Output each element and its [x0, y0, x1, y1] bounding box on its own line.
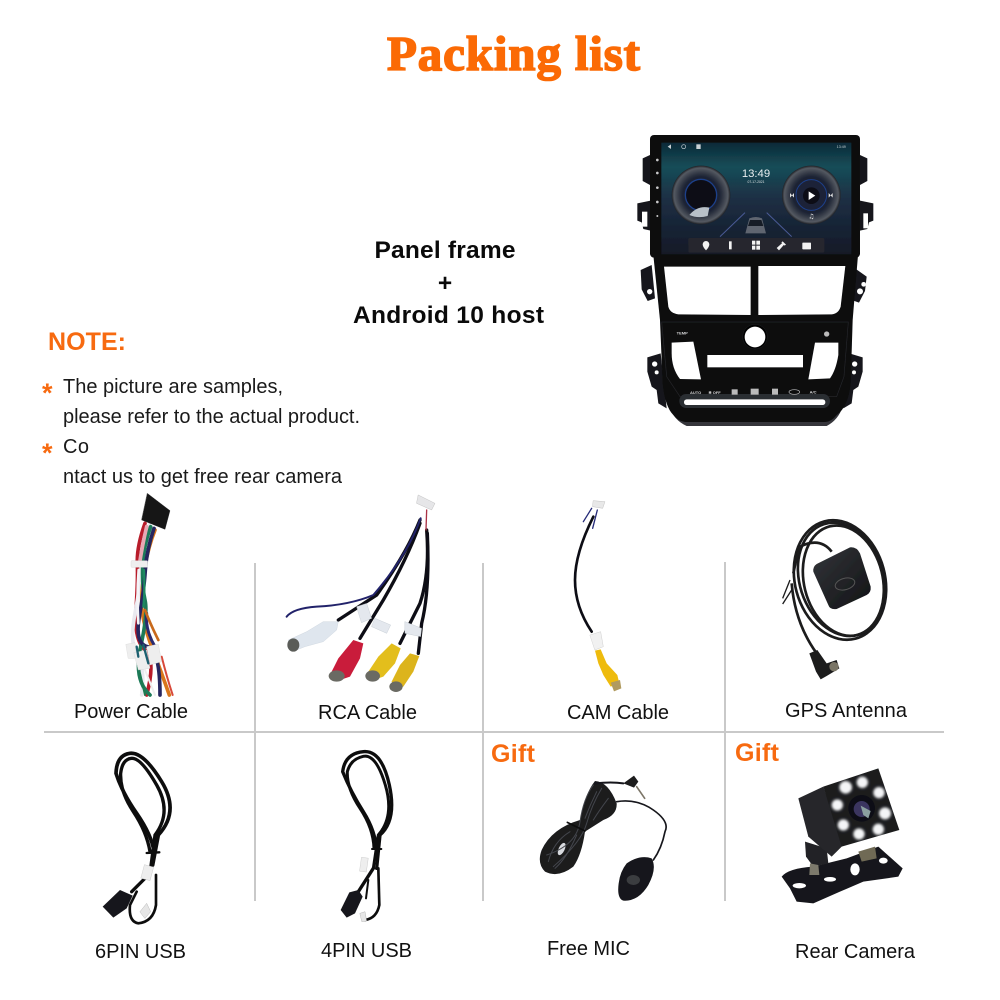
note text block: please refer to the actual product. — [63, 406, 360, 428]
screen bezel — [650, 135, 860, 258]
product image: head unit with panel frame: 07-17-2021 — [747, 180, 765, 184]
top status — [668, 144, 846, 149]
note text block: ntact us to get free rear camera — [63, 466, 343, 488]
white plug — [288, 622, 338, 651]
right dial: ♫ — [808, 213, 814, 221]
note text block: * — [42, 378, 53, 408]
road and car — [720, 213, 792, 237]
heading: panel frame and host — [353, 237, 544, 329]
label: 4PIN USB: 4PIN USB — [321, 940, 412, 962]
product image: CAM cable — [575, 501, 621, 691]
heading: panel frame and host: + — [438, 270, 452, 297]
climate labels — [677, 331, 829, 395]
label: RCA cable: RCA Cable — [318, 702, 417, 724]
side brackets — [637, 155, 873, 408]
yellow plugs — [368, 643, 401, 680]
gift tag: rear camera: Gift — [735, 739, 780, 767]
right dial — [782, 166, 841, 224]
vent cutouts — [664, 267, 751, 315]
product image: GPS antenna — [781, 510, 900, 679]
climate labels: TEMP — [677, 331, 688, 336]
screen — [661, 143, 851, 254]
top status: 13:49 — [837, 145, 846, 149]
product image: 4PIN USB — [341, 752, 392, 922]
label: free mic: Free MIC — [547, 938, 630, 960]
product image: head unit with panel frame — [637, 135, 873, 426]
product image: power cable — [126, 493, 173, 695]
label: GPS antenna: GPS Antenna — [785, 700, 908, 722]
product image: RCA cable — [287, 495, 435, 692]
climate labels: ❄ OFF — [708, 390, 721, 395]
side buttons — [656, 159, 659, 217]
label: power cable: Power Cable — [74, 701, 188, 723]
frame body — [670, 407, 843, 426]
left dial — [672, 166, 730, 224]
heading: panel frame and host: Android 10 host — [353, 302, 544, 329]
note text block: Co — [63, 436, 89, 458]
label: 6PIN USB: 6PIN USB — [95, 941, 186, 963]
note text block — [42, 376, 360, 488]
red plug — [332, 640, 363, 680]
labels — [357, 603, 422, 637]
product image: free mic — [540, 776, 666, 901]
dock — [688, 238, 824, 253]
note text block: * — [42, 438, 53, 468]
gift tag: free mic: Gift — [491, 740, 536, 768]
product image: 6PIN USB — [103, 753, 170, 923]
product image: rear camera — [782, 768, 903, 903]
climate labels: AUTO — [690, 390, 701, 395]
climate labels: A/C — [810, 389, 817, 394]
heading: panel frame and host: Panel frame — [374, 237, 516, 264]
label: CAM cable: CAM Cable — [567, 702, 669, 724]
climate panel — [662, 322, 848, 397]
clock: 13:49 — [742, 168, 770, 180]
title: Packing list — [387, 26, 641, 81]
note text block: The picture are samples, — [63, 376, 283, 398]
label: rear camera: Rear Camera — [795, 941, 916, 963]
note heading: NOTE: — [48, 328, 126, 356]
